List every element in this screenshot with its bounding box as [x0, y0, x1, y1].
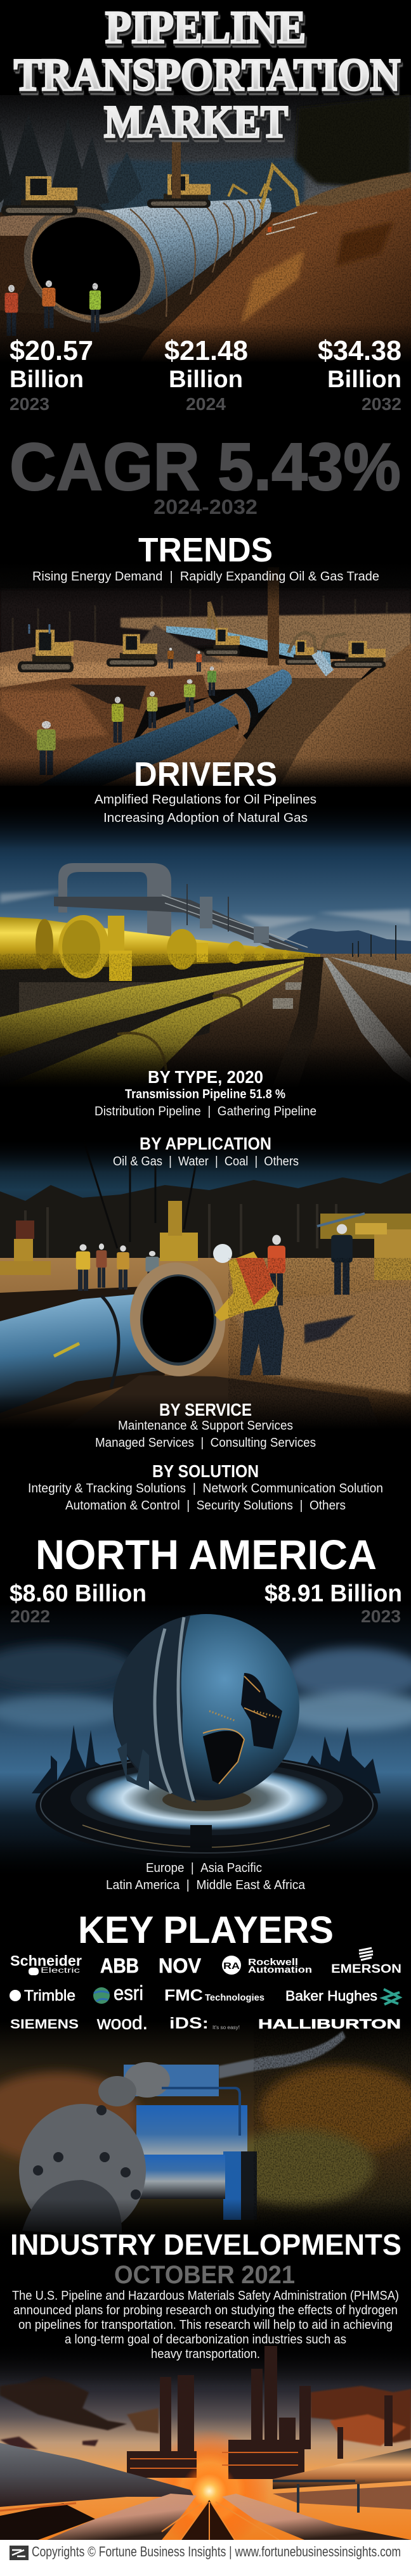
- middle yellow pipe: [0, 958, 319, 1057]
- logo: Schneider Electric: Schneider: [10, 1952, 82, 1969]
- by type segment: [95, 1067, 316, 1118]
- logo: IDS: iDS:: [169, 2015, 209, 2032]
- development description: heavy transportation.: [151, 2347, 260, 2361]
- icon: Fortune Business Insights logo: [10, 2546, 29, 2560]
- by solution segment: Automation & Control | Security Solutions | Others: [65, 1498, 346, 1513]
- blue valve assembly: [98, 2062, 257, 2220]
- by service segment: Managed Services | Consulting Services: [95, 1435, 316, 1450]
- heading: industry developments: INDUSTRY DEVELOPMENTS: [10, 2228, 401, 2261]
- stat: 2032 market size: Billion: [327, 366, 401, 393]
- logo: Rockwell Automation: RA: [223, 1961, 240, 1971]
- logo: Baker Hughes: Baker Hughes: [285, 1988, 377, 2004]
- logo: Rockwell Automation: Rockwell: [248, 1957, 298, 1968]
- large flange: [19, 2104, 146, 2237]
- power poles: [353, 925, 396, 960]
- by application photo: workers and pipe: [0, 1141, 411, 1430]
- logo: esri: [93, 1982, 143, 2004]
- trends photo: pipeline construction site: [0, 562, 411, 788]
- workers: [5, 280, 101, 336]
- by service segment: Maintenance & Support Services: [118, 1418, 293, 1433]
- excavators on site: [18, 567, 386, 673]
- development description: [12, 2288, 399, 2361]
- by type segment: Transmission Pipeline 51.8 %: [125, 1087, 285, 1101]
- title: PIPELINE: [105, 2, 306, 53]
- by application segment: [113, 1134, 299, 1169]
- leaning worker: [213, 1244, 284, 1375]
- logo: esri: esri: [114, 1982, 143, 2004]
- heading: drivers: Increasing Adoption of Natural Gas: [103, 811, 308, 825]
- logo: Halliburton: HALLIBURTON: [258, 2017, 401, 2032]
- stat: north america 2023: [264, 1580, 402, 1626]
- stat: 2024 market size: [164, 335, 248, 414]
- heading: trends: [32, 531, 379, 584]
- by type segment: Distribution Pipeline | Gathering Pipeline: [95, 1104, 316, 1118]
- logo: FMC Technologies: FMC: [164, 1987, 203, 2004]
- heading: key players: KEY PLAYERS: [78, 1909, 334, 1951]
- stat: north america 2022: 2022: [10, 1606, 50, 1626]
- regional photo: futuristic globe: [0, 1603, 411, 1876]
- key player logos: [10, 1948, 401, 2034]
- stat: north america 2022: [10, 1580, 147, 1626]
- excavators: [1, 141, 298, 215]
- stat: 2023 market size: Billion: [10, 366, 84, 393]
- heading: industry developments: [10, 2228, 401, 2289]
- stat: 2024 market size: $21.48: [164, 335, 248, 366]
- footer: [0, 2540, 411, 2576]
- upper yellow pipe with flanges: [0, 915, 320, 981]
- logo: IDS: [169, 2015, 240, 2032]
- title: MARKET: [104, 96, 288, 147]
- processing plant pipework: [54, 863, 308, 951]
- by service segment: BY SERVICE: [159, 1400, 252, 1419]
- stat: north america 2023: $8.91 Billion: [264, 1580, 402, 1607]
- concrete and steel supports: [19, 982, 174, 1014]
- stat: 2024 market size: 2024: [186, 394, 226, 414]
- other regions: Europe | Asia Pacific: [146, 1861, 262, 1875]
- heading: drivers: DRIVERS: [134, 755, 277, 793]
- skyline: [32, 1725, 381, 1800]
- heading: trends: TRENDS: [138, 531, 273, 569]
- logo: FMC Technologies: Technologies: [205, 1992, 264, 2003]
- refinery sunset photo: [0, 2342, 411, 2549]
- platform: [36, 1754, 378, 1858]
- logo: Emerson: EMERSON: [331, 1963, 401, 1976]
- right grey pipeline: [323, 958, 411, 1084]
- by solution segment: BY SOLUTION: [152, 1461, 259, 1481]
- heading: trends: Rising Energy Demand | Rapidly Expanding Oil & Gas Trade: [32, 569, 379, 584]
- by type photo: yellow pipelines: [0, 805, 411, 1087]
- title: [14, 2, 400, 147]
- machinery: [0, 1201, 411, 1280]
- valves photo: autumn hillside: [0, 2022, 411, 2241]
- heading: drivers: Amplified Regulations for Oil Pipelines: [95, 792, 316, 807]
- clouds: [0, 2376, 411, 2449]
- lower yellow pipe: [0, 959, 320, 1087]
- site workers: [37, 648, 216, 775]
- stat: 2032 market size: [318, 335, 401, 414]
- refinery towers: [127, 2346, 393, 2479]
- logo: Wood: wood.: [96, 2013, 148, 2034]
- heading: drivers: [95, 755, 316, 825]
- logo: ABB: ABB: [100, 1954, 139, 1977]
- globe with city lights: [113, 1614, 299, 1803]
- hero photo: pipeline trench: [0, 95, 411, 362]
- by application segment: Oil & Gas | Water | Coal | Others: [113, 1154, 299, 1169]
- main blue pipe: [38, 669, 292, 786]
- by application segment: BY APPLICATION: [140, 1134, 271, 1153]
- by solution segment: Integrity & Tracking Solutions | Network Communication Solution: [28, 1481, 383, 1496]
- logo: FMC Technologies: [164, 1987, 264, 2004]
- development description: a long-term goal of decarbonization industries such as: [65, 2332, 346, 2347]
- other regions: Latin America | Middle East & Africa: [106, 1878, 306, 1892]
- logo: Schneider Electric: Electric: [41, 1966, 80, 1975]
- logo: Siemens: SIEMENS: [10, 2017, 79, 2032]
- stat: 2032 market size: $34.38: [318, 335, 401, 366]
- stat: north america 2023: 2023: [361, 1606, 401, 1626]
- stat: 2023 market size: $20.57: [10, 335, 93, 366]
- stat: 2032 market size: 2032: [362, 394, 401, 414]
- CAGR figure: 2024-2032: [153, 496, 258, 518]
- stat: 2024 market size: Billion: [169, 366, 243, 393]
- pipe with open end: [0, 1258, 231, 1413]
- by service segment: [95, 1400, 316, 1450]
- logo: Rockwell Automation: [222, 1956, 312, 1975]
- pipeline body and mouth: [3, 184, 271, 345]
- pipelines: [0, 2443, 411, 2540]
- workers at the pipe: [76, 1224, 353, 1305]
- logo: Rockwell Automation: Automation: [248, 1964, 312, 1975]
- far blue pipe: [166, 626, 331, 665]
- logo: NOV: NOV: [159, 1954, 202, 1977]
- heading: north america: NORTH AMERICA: [36, 1531, 377, 1578]
- stat: 2023 market size: [10, 335, 93, 414]
- by solution segment: [28, 1461, 383, 1513]
- heading: industry developments: OCTOBER 2021: [114, 2261, 295, 2289]
- by type segment: BY TYPE, 2020: [148, 1067, 263, 1087]
- logo: Trimble: Trimble: [24, 1987, 75, 2004]
- CAGR figure: CAGR 5.43%: [10, 430, 401, 504]
- logo: IDS: It's so easy!: [212, 2025, 240, 2030]
- logo: Emerson: [331, 1948, 401, 1976]
- other regions: [106, 1861, 306, 1892]
- stat: 2023 market size: 2023: [10, 394, 49, 414]
- stat: north america 2022: $8.60 Billion: [10, 1580, 147, 1607]
